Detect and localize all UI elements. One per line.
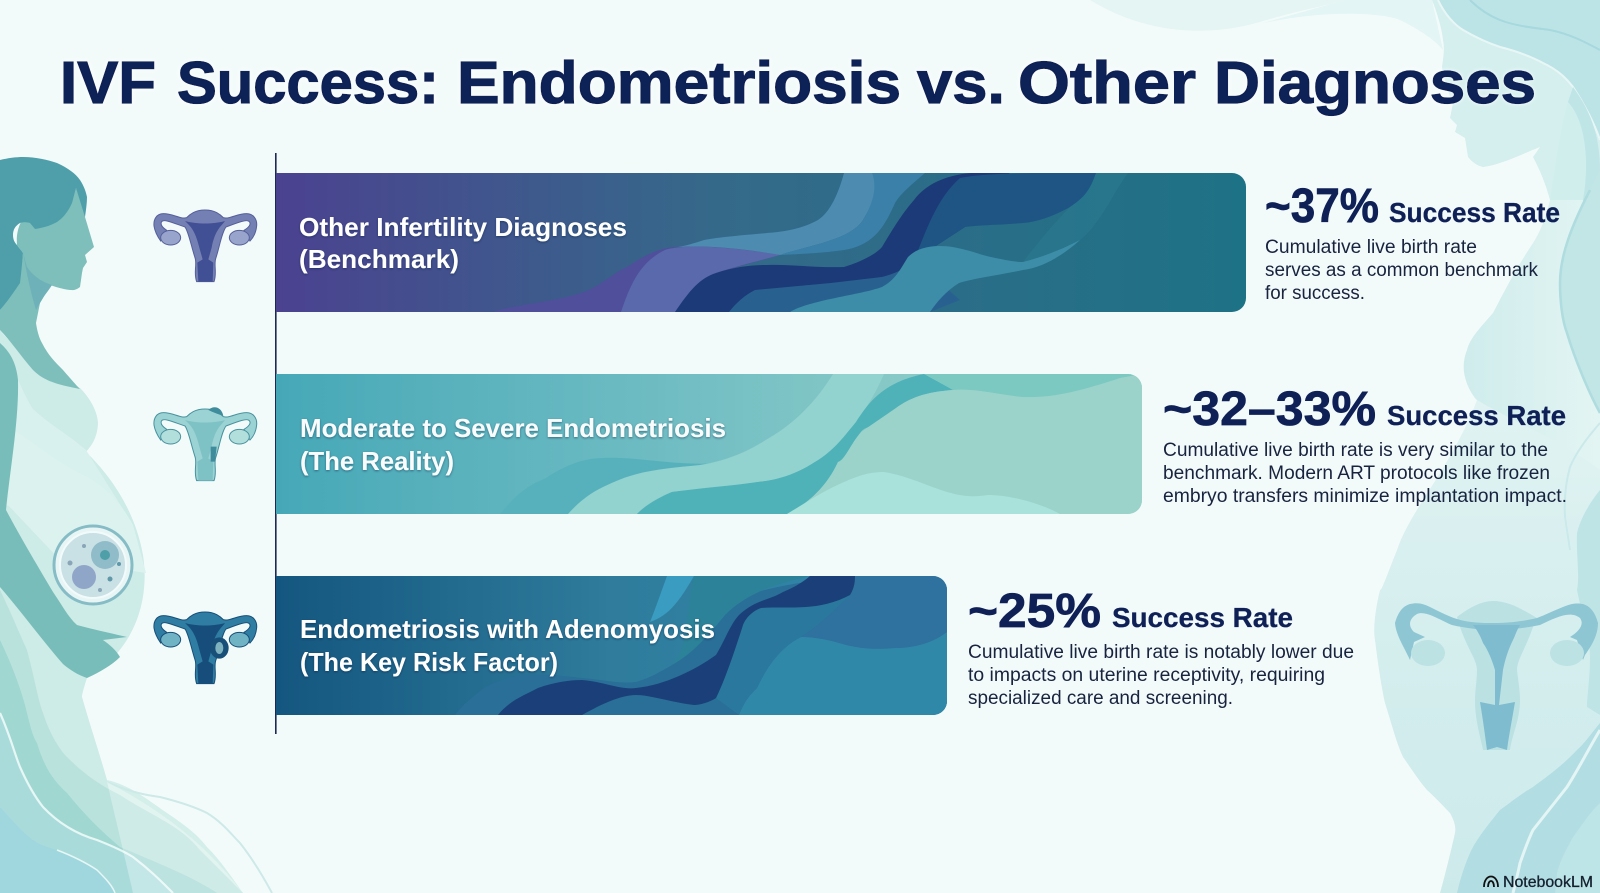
text block: 32 to 33 percent: embryo transfers minimize implantation impact. [1163,486,1567,507]
right side band [1560,170,1600,413]
label: other infertility diagnoses: Other Infertility Diagnoses [299,212,627,242]
panel: moderate to severe endometriosis bar [276,374,1142,514]
text block: 37 percent: serves as a common benchmark [1265,260,1538,281]
neck shadow [23,252,52,310]
title: Endometriosis [457,50,901,116]
body wave [1374,369,1600,893]
label: moderate to severe endometriosis: Moderate to Severe Endometriosis [300,413,726,443]
text block: 37 percent: ~37% [1265,180,1379,233]
text block: 25 percent [968,585,1354,709]
veil behind dress [107,780,243,893]
hair upper [1438,0,1600,140]
text block: 25 percent: Success Rate [1112,602,1293,633]
title [60,50,1536,116]
label: other infertility diagnoses: (Benchmark) [299,244,459,274]
icon: uterus endometriosis (teal) [154,407,257,481]
lighter strip [1550,102,1586,200]
text block: 25 percent: to impacts on uterine receptivity, requiring [968,665,1325,686]
panel: endometriosis with adenomyosis bar [276,576,947,715]
text block: 32 to 33 percent: ~32–33% [1163,383,1376,436]
right decoration: flowing silhouette and waves [1090,0,1600,893]
text block: 25 percent: ~25% [968,585,1101,638]
text block: 32 to 33 percent: Cumulative live birth rate is very similar to the [1163,440,1548,461]
label: moderate to severe endometriosis [300,413,726,476]
dress base [0,330,145,893]
text block: 37 percent: Success Rate [1389,197,1560,228]
label: endometriosis with adenomyosis: Endometriosis with Adenomyosis [300,614,715,644]
panel: other infertility diagnoses bar [276,173,1246,312]
icon: uterus adenomyosis (dark blue) [154,612,257,684]
text block: 37 percent: Cumulative live birth rate [1265,237,1477,258]
label: other infertility diagnoses [299,212,627,274]
title: IVF [60,50,156,116]
text block: 32 to 33 percent: benchmark. Modern ART protocols like frozen [1163,463,1550,484]
label: moderate to severe endometriosis: (The Reality) [300,446,454,476]
title: Diagnoses [1214,50,1536,116]
title: Success: [177,50,439,116]
hair [0,157,87,310]
shoulder [1464,150,1600,470]
label: endometriosis with adenomyosis: (The Key Risk Factor) [300,647,558,677]
arm [0,343,127,678]
icon: large faint uterus [1395,601,1598,750]
title: Other [1018,50,1196,116]
text block: 37 percent: for success. [1265,283,1365,304]
title: vs. [917,50,1005,116]
text block: 32 to 33 percent: Success Rate [1387,400,1566,431]
face [1432,0,1600,200]
left decoration: pregnant woman silhouette [0,157,272,893]
text block: 25 percent: Cumulative live birth rate is notably lower due [968,642,1354,663]
label: endometriosis with adenomyosis [300,614,715,677]
icon: uterus benchmark (purple) [154,210,257,282]
skirt bands [0,590,243,893]
chest band [6,380,146,573]
lower waves [1457,723,1600,893]
axis line [275,153,277,734]
notebooklm logo: NotebookLM [1503,874,1593,891]
head, neck and chest skin [0,188,94,389]
text block: 32 to 33 percent [1163,383,1567,507]
text block: 25 percent: specialized care and screening. [968,688,1233,709]
text block: 37 percent [1265,180,1560,304]
icon: petri dish with embryo cells [54,526,132,604]
